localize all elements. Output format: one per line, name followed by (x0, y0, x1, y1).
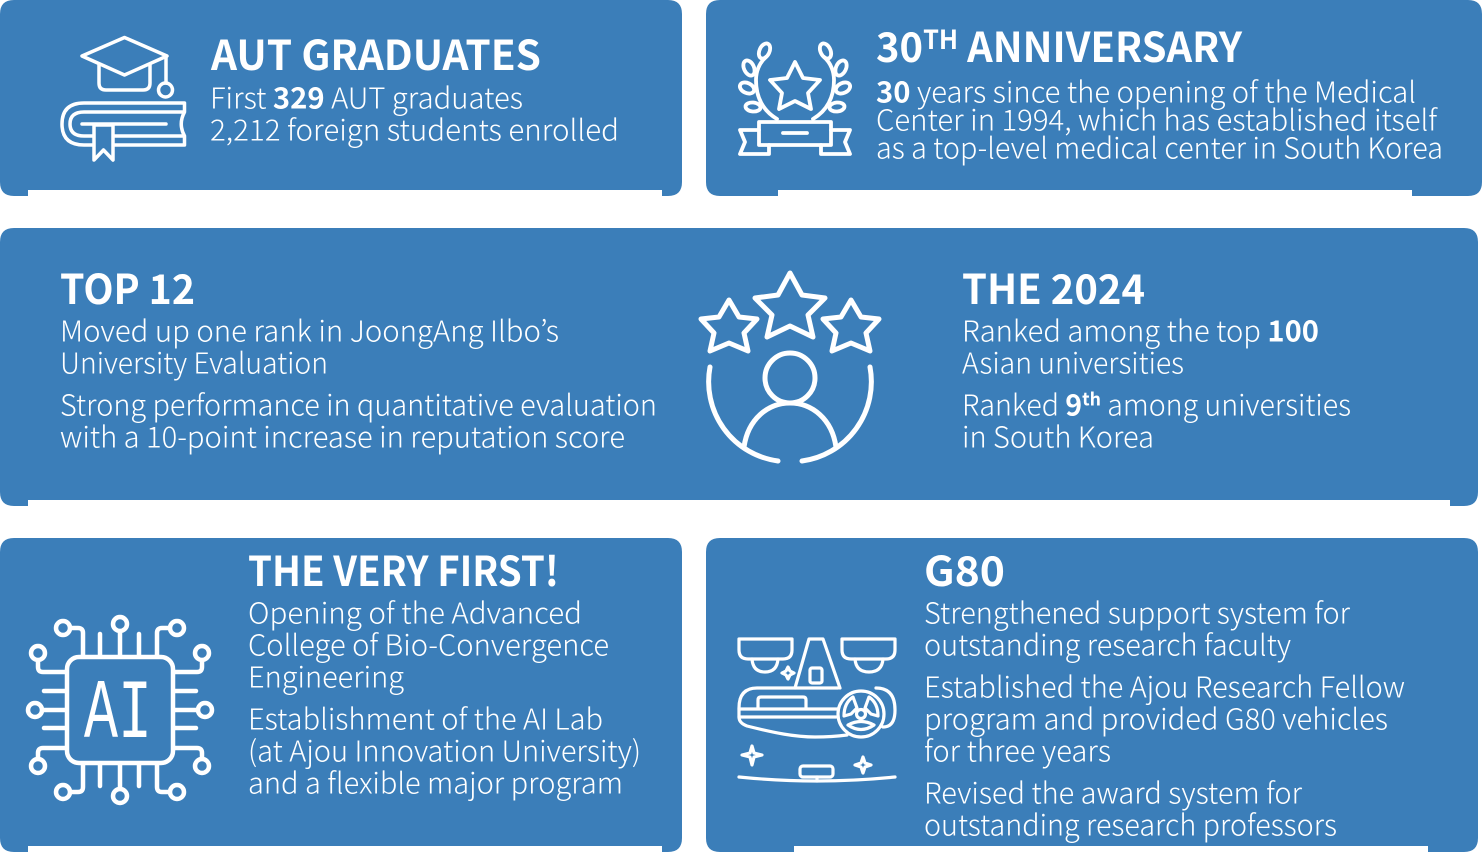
text block: 30 years since the opening of the Medical (876, 70, 1416, 112)
text block: Established the Ajou Research Fellow (924, 664, 1405, 706)
text block (876, 70, 1443, 168)
text block: THE ranking: in South Korea (962, 414, 1154, 456)
icon: graduation cap on book (62, 38, 184, 160)
panel background (706, 0, 1482, 196)
text block: outstanding research faculty (924, 622, 1291, 664)
text block: Establishment of the AI Lab (248, 696, 603, 738)
heading: 30 (876, 14, 924, 74)
icon: person with three stars (701, 273, 879, 461)
panel: rankings (0, 228, 1478, 506)
text block: College of Bio-Convergence (248, 622, 609, 664)
text block: Center in 1994, which has established itself (876, 98, 1438, 140)
panel background (0, 538, 682, 852)
text block: program and provided G80 vehicles (924, 696, 1388, 738)
text block: JoongAng Ilbo evaluation: Moved up one rank in JoongAng Ilbo’s (60, 308, 559, 350)
heading: TH (923, 20, 958, 57)
text block: as a top-level medical center in South Korea (876, 126, 1443, 168)
heading: THE 2024: THE 2024 (962, 256, 1145, 316)
panel: 30th anniversary (706, 0, 1482, 196)
panel background (0, 0, 682, 196)
panel: the very first (0, 538, 682, 852)
text block: Opening of the Advanced (248, 590, 582, 632)
text block (210, 76, 619, 150)
icon: AI chip (28, 617, 212, 803)
text block: Strengthened support system for (924, 590, 1351, 632)
icon: AI chip: AI (84, 668, 152, 763)
panel: AUT graduates (0, 0, 682, 196)
text block: and a flexible major program (248, 760, 623, 802)
text block: THE ranking: among universities (1101, 382, 1351, 424)
text block: THE ranking: Asian universities (962, 340, 1184, 382)
heading: THE VERY FIRST! (248, 538, 559, 598)
panel background (0, 228, 1478, 506)
text block: THE ranking (962, 308, 1351, 456)
panel: G80 (706, 538, 1478, 852)
text block: outstanding research professors (924, 802, 1337, 844)
icon: laurel wreath with star (738, 42, 852, 154)
text block: (at Ajou Innovation University) (248, 728, 641, 770)
heading: ANNIVERSARY (958, 14, 1243, 74)
text block: 2,212 foreign students enrolled (210, 108, 619, 150)
text block: JoongAng Ilbo evaluation: with a 10-point increase in reputation score (60, 414, 625, 456)
text block: JoongAng Ilbo evaluation: University Evaluation (60, 340, 328, 382)
heading: G80 (924, 538, 1005, 598)
text block: JoongAng Ilbo evaluation: Strong performance in quantitative evaluation (60, 382, 657, 424)
icon: car interior (739, 639, 895, 781)
text block: Engineering (248, 654, 404, 696)
text block: THE ranking: Ranked 9 (962, 382, 1082, 424)
panel background (706, 538, 1478, 852)
heading: AUT GRADUATES (210, 22, 541, 82)
text block (924, 590, 1405, 844)
text block: THE ranking: th (1082, 386, 1101, 412)
heading: top 12: TOP 12 (60, 256, 195, 316)
text block (248, 590, 641, 802)
text block: JoongAng Ilbo evaluation (60, 308, 657, 456)
text block: THE ranking: Ranked among the top 100 (962, 308, 1319, 350)
text block: for three years (924, 728, 1111, 770)
text block: Revised the award system for (924, 770, 1303, 812)
text block: First 329 AUT graduates (210, 76, 523, 118)
